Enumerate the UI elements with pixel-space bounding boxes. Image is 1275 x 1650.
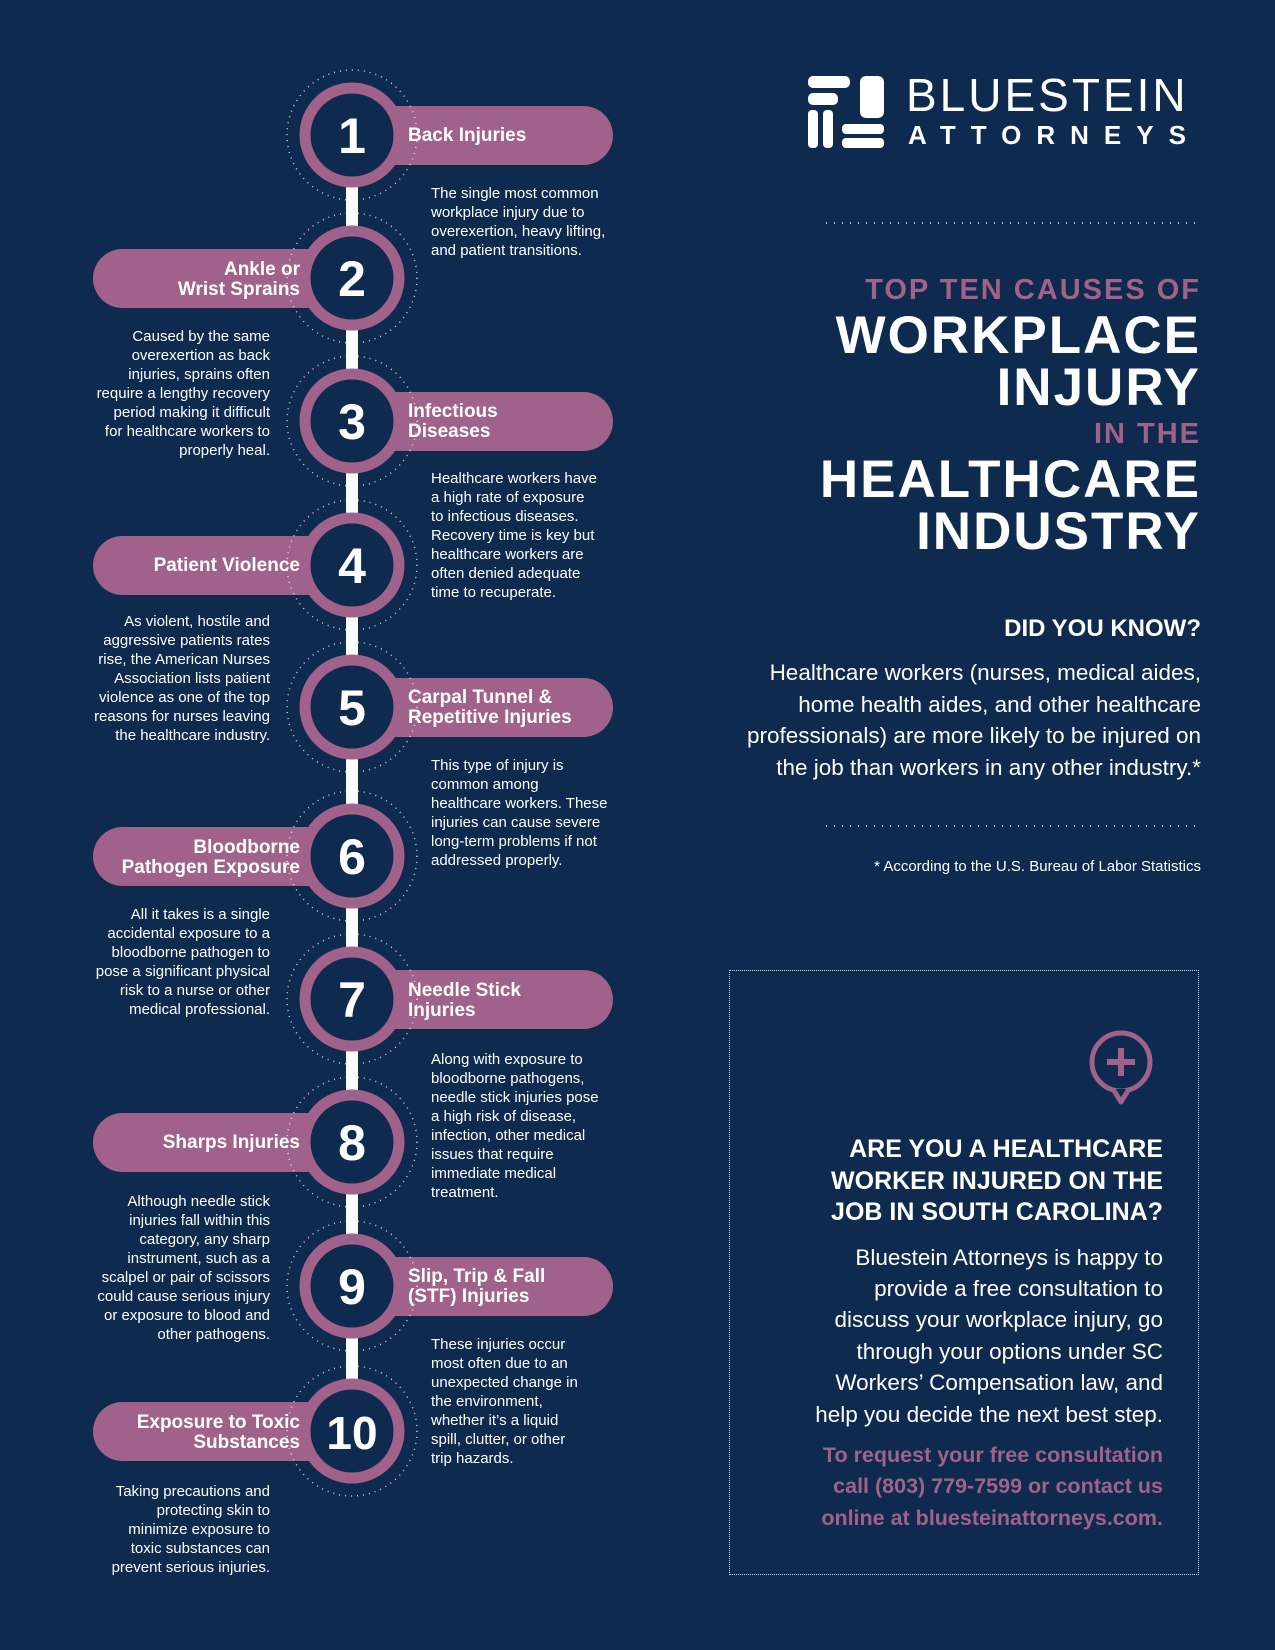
label 9: Slip, Trip & Fall bbox=[408, 1266, 545, 1287]
logo bbox=[808, 69, 1201, 150]
timeline graphic: 7 bbox=[338, 972, 366, 1028]
label 6: Pathogen Exposure bbox=[122, 857, 300, 878]
desc 2: injuries, sprains often bbox=[128, 366, 270, 383]
label 1: Back Injuries bbox=[408, 125, 526, 146]
desc 6: pose a significant physical bbox=[96, 963, 270, 980]
desc 8: scalpel or pair of scissors bbox=[102, 1269, 270, 1286]
timeline graphic: 2 bbox=[338, 251, 366, 307]
timeline graphic: 3 bbox=[338, 394, 366, 450]
desc 7: treatment. bbox=[431, 1184, 499, 1201]
desc 8: instrument, such as a bbox=[127, 1250, 270, 1267]
desc 9: trip hazards. bbox=[431, 1450, 514, 1467]
timeline graphic: 5 bbox=[338, 680, 366, 736]
desc 6: bloodborne pathogen to bbox=[112, 944, 270, 961]
timeline graphic: 6 bbox=[338, 829, 366, 885]
desc 9: the environment, bbox=[431, 1393, 543, 1410]
desc 4 bbox=[94, 613, 270, 744]
desc 5: This type of injury is bbox=[431, 757, 564, 774]
desc 8: injuries fall within this bbox=[129, 1212, 270, 1229]
desc 9: most often due to an bbox=[431, 1355, 568, 1372]
did you know bbox=[747, 615, 1201, 780]
cta text: Workers’ Compensation law, and bbox=[835, 1370, 1163, 1395]
label 6 bbox=[122, 837, 300, 878]
cta text: call (803) 779-7599 or contact us bbox=[833, 1474, 1163, 1498]
desc 3: time to recuperate. bbox=[431, 584, 556, 601]
desc 5 bbox=[431, 757, 607, 869]
cta box bbox=[729, 970, 1199, 1575]
label 10 bbox=[137, 1412, 300, 1453]
cta text: through your options under SC bbox=[857, 1339, 1163, 1364]
timeline graphic: 9 bbox=[338, 1259, 366, 1315]
desc 10: minimize exposure to bbox=[128, 1521, 270, 1538]
title: TOP TEN CAUSES OF bbox=[865, 274, 1201, 306]
desc 9: whether it’s a liquid bbox=[431, 1412, 558, 1429]
desc 1: workplace injury due to bbox=[431, 204, 584, 221]
desc 5: addressed properly. bbox=[431, 852, 562, 869]
desc 7: needle stick injuries pose bbox=[431, 1089, 599, 1106]
desc 7: immediate medical bbox=[431, 1165, 556, 1182]
label 10: Exposure to Toxic bbox=[137, 1412, 300, 1433]
label 2: Wrist Sprains bbox=[178, 279, 300, 300]
desc 1: overexertion, heavy lifting, bbox=[431, 223, 605, 240]
label 3: Infectious bbox=[408, 401, 498, 422]
desc 3: often denied adequate bbox=[431, 565, 580, 582]
label 2 bbox=[178, 259, 300, 300]
label 5: Repetitive Injuries bbox=[408, 707, 572, 728]
desc 2: properly heal. bbox=[179, 442, 270, 459]
desc 3: to infectious diseases. bbox=[431, 508, 579, 525]
desc 5: long-term problems if not bbox=[431, 833, 597, 850]
cta text: online at bluesteinattorneys.com. bbox=[821, 1506, 1163, 1530]
title: WORKPLACE bbox=[836, 306, 1201, 365]
label 6: Bloodborne bbox=[193, 837, 300, 858]
icon: medical pin bbox=[1090, 1030, 1152, 1104]
timeline graphic bbox=[93, 69, 613, 1497]
desc 5: common among bbox=[431, 776, 539, 793]
desc 6: risk to a nurse or other bbox=[120, 982, 270, 999]
desc 6 bbox=[96, 906, 270, 1018]
did you know: the job than workers in any other industry.* bbox=[776, 755, 1201, 780]
label 7: Needle Stick bbox=[408, 980, 521, 1001]
label 9: (STF) Injuries bbox=[408, 1286, 529, 1307]
did you know: home health aides, and other healthcare bbox=[798, 692, 1201, 717]
desc 8 bbox=[97, 1193, 270, 1343]
desc 9: unexpected change in bbox=[431, 1374, 578, 1391]
desc 8: Although needle stick bbox=[127, 1193, 270, 1210]
desc 8: other pathogens. bbox=[157, 1326, 270, 1343]
did you know: Healthcare workers (nurses, medical aides, bbox=[770, 660, 1201, 685]
desc 1: The single most common bbox=[431, 185, 599, 202]
desc 2: period making it difficult bbox=[114, 404, 270, 421]
cta text: To request your free consultation bbox=[823, 1443, 1163, 1467]
cta text: provide a free consultation to bbox=[874, 1276, 1163, 1301]
desc 10: protecting skin to bbox=[157, 1502, 270, 1519]
desc 2: for healthcare workers to bbox=[105, 423, 270, 440]
label 7: Injuries bbox=[408, 1000, 476, 1021]
desc 9: spill, clutter, or other bbox=[431, 1431, 565, 1448]
cta text: JOB IN SOUTH CAROLINA? bbox=[831, 1198, 1163, 1226]
desc 2 bbox=[97, 328, 270, 459]
desc 8: could cause serious injury bbox=[97, 1288, 270, 1305]
timeline graphic: 1 bbox=[338, 108, 366, 164]
label 8: Sharps Injuries bbox=[163, 1132, 300, 1153]
desc 4: aggressive patients rates bbox=[103, 632, 270, 649]
cta text: ARE YOU A HEALTHCARE bbox=[849, 1135, 1163, 1163]
timeline graphic: 10 bbox=[326, 1407, 378, 1459]
desc 8: category, any sharp bbox=[139, 1231, 270, 1248]
cta text: help you decide the next best step. bbox=[815, 1402, 1163, 1427]
desc 4: the healthcare industry. bbox=[115, 727, 270, 744]
desc 8: or exposure to blood and bbox=[104, 1307, 270, 1324]
desc 7: bloodborne pathogens, bbox=[431, 1070, 584, 1087]
title bbox=[820, 274, 1201, 561]
desc 9: These injuries occur bbox=[431, 1336, 565, 1353]
desc 2: overexertion as back bbox=[132, 347, 270, 364]
desc 3: Healthcare workers have bbox=[431, 470, 597, 487]
desc 6: accidental exposure to a bbox=[107, 925, 270, 942]
desc 4: reasons for nurses leaving bbox=[94, 708, 270, 725]
desc 3: a high rate of exposure bbox=[431, 489, 584, 506]
desc 6: medical professional. bbox=[129, 1001, 270, 1018]
desc 7: infection, other medical bbox=[431, 1127, 585, 1144]
title: HEALTHCARE bbox=[820, 450, 1201, 509]
desc 7 bbox=[431, 1051, 599, 1201]
desc 4: Association lists patient bbox=[114, 670, 270, 687]
label 9 bbox=[408, 1266, 545, 1307]
logo: ATTORNEYS bbox=[908, 120, 1201, 150]
desc 5: injuries can cause severe bbox=[431, 814, 600, 831]
desc 10 bbox=[112, 1483, 270, 1576]
desc 10: Taking precautions and bbox=[116, 1483, 270, 1500]
cta text bbox=[815, 1135, 1163, 1530]
desc 3: Recovery time is key but bbox=[431, 527, 594, 544]
desc 7: issues that require bbox=[431, 1146, 554, 1163]
desc 4: violence as one of the top bbox=[99, 689, 270, 706]
desc 10: toxic substances can bbox=[131, 1540, 270, 1557]
title: INDUSTRY bbox=[916, 502, 1201, 561]
desc 3: healthcare workers are bbox=[431, 546, 584, 563]
desc 4: rise, the American Nurses bbox=[98, 651, 270, 668]
did you know: professionals) are more likely to be injured on bbox=[747, 723, 1201, 748]
cta text: WORKER INJURED ON THE bbox=[831, 1166, 1163, 1194]
desc 1: and patient transitions. bbox=[431, 242, 582, 259]
title: INJURY bbox=[997, 358, 1201, 417]
label 3: Diseases bbox=[408, 421, 490, 442]
desc 5: healthcare workers. These bbox=[431, 795, 607, 812]
label 4: Patient Violence bbox=[154, 555, 300, 576]
cta text: Bluestein Attorneys is happy to bbox=[855, 1244, 1163, 1270]
timeline graphic: 8 bbox=[338, 1115, 366, 1171]
label 3 bbox=[408, 401, 498, 442]
desc 2: Caused by the same bbox=[132, 328, 270, 345]
desc 7: a high risk of disease, bbox=[431, 1108, 576, 1125]
timeline graphic: 4 bbox=[338, 538, 366, 594]
desc 9 bbox=[431, 1336, 578, 1467]
desc 7: Along with exposure to bbox=[431, 1051, 583, 1068]
logo mark bbox=[808, 76, 884, 148]
label 10: Substances bbox=[193, 1432, 300, 1453]
label 7 bbox=[408, 980, 521, 1021]
label 5: Carpal Tunnel & bbox=[408, 687, 552, 708]
label 2: Ankle or bbox=[224, 259, 300, 280]
desc 6: All it takes is a single bbox=[131, 906, 270, 923]
desc 1 bbox=[431, 185, 605, 259]
label 5 bbox=[408, 687, 572, 728]
desc 3 bbox=[431, 470, 597, 601]
did you know: DID YOU KNOW? bbox=[1004, 615, 1201, 642]
footnote: * According to the U.S. Bureau of Labor Statistics bbox=[874, 858, 1201, 875]
desc 10: prevent serious injuries. bbox=[112, 1559, 270, 1576]
desc 2: require a lengthy recovery bbox=[97, 385, 270, 402]
title: IN THE bbox=[1094, 418, 1201, 450]
logo text: BLUESTEIN bbox=[906, 69, 1189, 121]
cta text: discuss your workplace injury, go bbox=[835, 1307, 1163, 1332]
desc 4: As violent, hostile and bbox=[124, 613, 270, 630]
